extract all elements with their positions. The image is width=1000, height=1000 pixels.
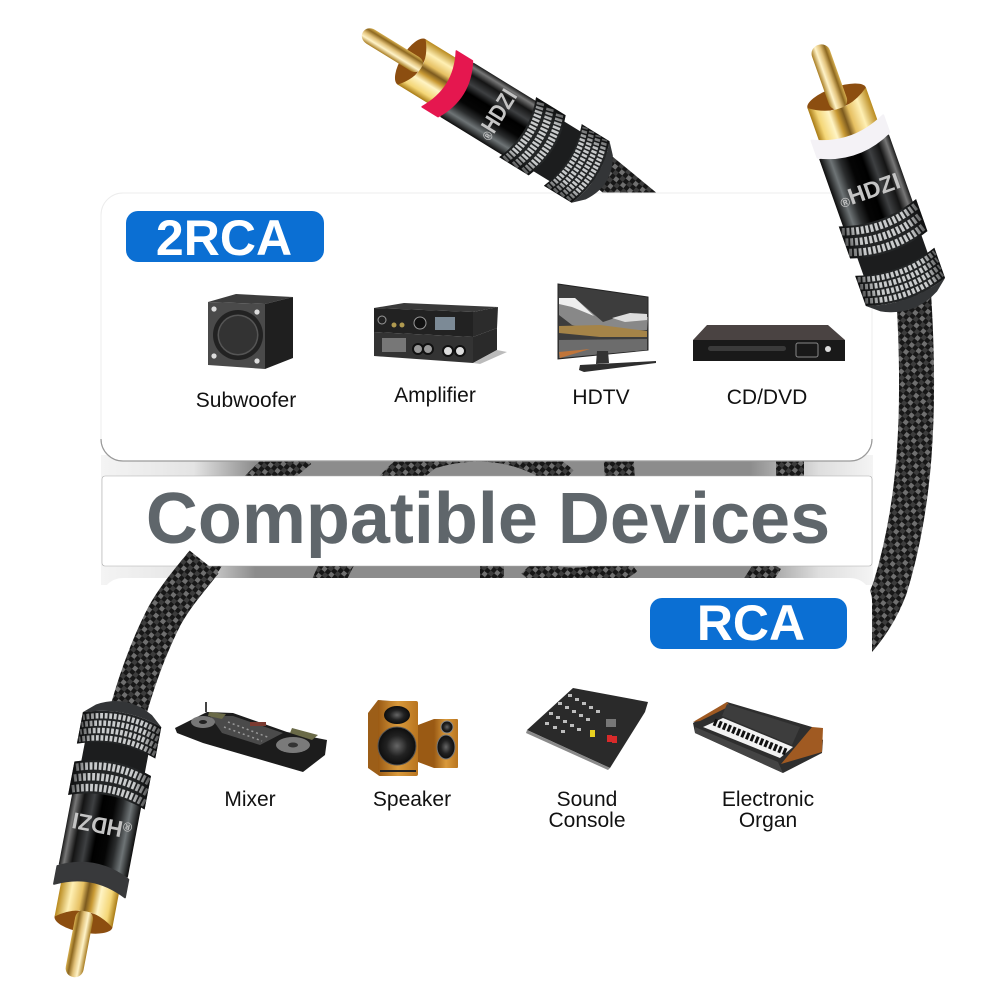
label: Sound Console: Sound: [557, 788, 617, 811]
label: Mixer: Mixer: [224, 788, 276, 811]
icon: sound console: [526, 688, 648, 770]
badge: RCA: [650, 595, 847, 651]
plug: white connector (right): [778, 31, 951, 323]
icon: amplifier: [374, 303, 507, 364]
HDZI logo: ®HDZI: [835, 167, 904, 213]
HDZI logo: ®HDZI: [471, 84, 523, 145]
cable: top lead: [596, 165, 681, 235]
label: Sound Console: Console: [548, 809, 626, 832]
icon: DJ mixer: [175, 702, 327, 772]
plug: red connector (top): [344, 1, 625, 212]
white collar: [812, 115, 892, 166]
icon: HDTV: [558, 284, 656, 372]
label: Electronic Organ: Organ: [739, 809, 797, 832]
cable: right lead: [850, 285, 917, 650]
badge: RCA: RCA: [697, 595, 805, 651]
plug: black connector (left): [34, 694, 165, 984]
panel: RCA devices: [101, 578, 872, 848]
gap background with coiled cable: [101, 449, 873, 590]
icon: electronic organ: [693, 702, 823, 773]
badge: 2RCA: 2RCA: [156, 210, 292, 266]
HDZI logo: ®HDZI: [70, 807, 134, 844]
red collar: [422, 51, 480, 121]
label: HDTV: HDTV: [572, 386, 630, 409]
panel: Compatible Devices heading band: [102, 476, 872, 566]
label: Amplifier: Amplifier: [394, 384, 476, 407]
icon: CD/DVD player: [693, 325, 845, 361]
label: CD/DVD: CD/DVD: [727, 386, 807, 409]
heading: Compatible Devices: Compatible Devices: [146, 479, 830, 559]
cable: left lead: [129, 562, 204, 708]
black collar: [54, 857, 130, 897]
icon: speakers: [368, 700, 458, 776]
panel: 2RCA devices: [101, 193, 872, 461]
badge: 2RCA: [126, 210, 324, 266]
icon: subwoofer: [208, 294, 293, 369]
label: Subwoofer: Subwoofer: [196, 389, 296, 412]
label: Electronic Organ: Electronic: [722, 788, 814, 811]
label: Speaker: Speaker: [373, 788, 451, 811]
